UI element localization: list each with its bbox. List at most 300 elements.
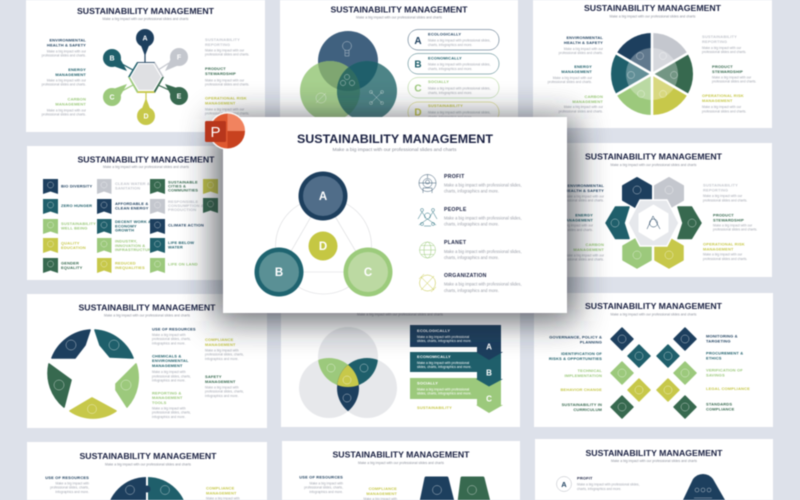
right labels: OPERATIONAL RISK: [205, 96, 247, 100]
hub diagram: F: [177, 54, 182, 62]
main slide shadow: [215, 119, 575, 321]
left labels: ENVIRONMENTAL: [567, 183, 604, 188]
slide: grey venn with arrow boxes: [280, 313, 520, 428]
right labels: Make a big impact with our: [205, 48, 245, 52]
ribbon column 3: LIFE BELOW: [168, 240, 194, 245]
compliance label: [363, 486, 397, 500]
ribbon column 2: AFFORDABLE &: [115, 201, 148, 206]
option A: [556, 476, 640, 492]
ribbon column 1: QUALITY: [61, 240, 80, 246]
right labels: STEWARDSHIP: [712, 69, 743, 74]
right column labels: COMPLIANCE: [205, 337, 234, 342]
ribbon column 3: WATER: [168, 244, 183, 250]
list item: planet: Make a big impact with professional slides,: [444, 249, 522, 254]
list item: profit: PROFIT: [444, 174, 465, 180]
shield shape: [683, 474, 725, 500]
slide subtitle: Make a big impact with our professional slides and charts: [610, 14, 696, 18]
slide title: SUSTAINABILITY MANAGEMENT: [80, 452, 216, 461]
pills A-D: ECONOMICALLY: [428, 56, 462, 60]
segmented ring: [48, 330, 138, 418]
right column labels: professional slides, charts,: [205, 352, 244, 356]
ribbon column 1: ZERO HUNGER: [61, 203, 92, 208]
left labels: Make a big impact with our: [47, 50, 87, 54]
pills A-D: charts, infographics and more.: [428, 91, 472, 95]
left labels: MANAGEMENT: [55, 102, 86, 106]
slide subtitle: Make a big impact with our professional slides and charts: [103, 17, 189, 21]
list item: profit: [419, 174, 522, 194]
hub diagram: D: [143, 114, 149, 120]
right labels: PRODUCT: [712, 64, 733, 69]
trapezoid shapes: [421, 478, 489, 500]
ribbon column 2: GROWTH: [115, 228, 134, 232]
right labels: SUSTAINABILITY: [205, 37, 240, 42]
right labels: [706, 334, 750, 412]
pills A-D: charts, infographics and more.: [428, 43, 472, 47]
center column labels: MANAGEMENT: [152, 363, 183, 368]
pills A-D: A: [414, 36, 422, 47]
icon: pie segment glyphs: [628, 52, 678, 98]
slide subtitle: Make a big impact with our professional slides and charts: [356, 16, 442, 20]
left labels: Make a big impact with our: [565, 254, 605, 258]
pills A-D: SOCIALLY: [428, 79, 449, 84]
slide title: SUSTAINABILITY MANAGEMENT: [585, 152, 722, 162]
left labels: professional slides and charts.: [42, 112, 86, 116]
right labels: Make a big impact with our: [713, 224, 753, 228]
main subtitle: Make a big impact with our professional slides and charts: [333, 147, 457, 153]
list item: profit: charts, infographics and more.: [444, 188, 499, 194]
right labels: [702, 34, 756, 114]
ribbon column 1: BIO DIVERSITY: [61, 184, 92, 188]
arrow boxes: A: [486, 342, 492, 352]
compliance label: MANAGEMENT: [366, 491, 397, 496]
right labels: SUSTAINABILITY: [703, 182, 738, 188]
left labels: [549, 183, 605, 262]
right labels: professional slides and charts.: [702, 50, 746, 54]
left label: USE OF RESOURCES: [45, 475, 89, 480]
left labels: professional slides and charts.: [560, 198, 604, 202]
pills A-D: C: [414, 84, 422, 94]
option A: PROFIT: [577, 476, 593, 480]
icon: light bulb: [342, 42, 352, 56]
slide title: SUSTAINABILITY MANAGEMENT: [330, 6, 468, 14]
left label: [45, 475, 89, 494]
left label: [299, 474, 343, 494]
right labels: SAVINGS: [706, 372, 725, 378]
center column labels: REPORTING &: [152, 390, 181, 396]
venn diagram: [300, 31, 397, 121]
list item: profit: Make a big impact with professional slides,: [444, 182, 522, 188]
left labels: BEHAVIOR CHANGE: [560, 387, 602, 392]
left labels: SUSTAINABILITY IN: [562, 402, 602, 407]
right column labels: SAFETY: [205, 374, 222, 379]
list item: organization: Make a big impact with professional slides,: [444, 282, 522, 286]
right labels: REPORTING: [702, 39, 727, 44]
left labels: IDENTIFICATION OF: [561, 351, 602, 356]
right column labels: Make a big impact with: [205, 348, 239, 352]
slide subtitle: Make a big impact with our professional slides and charts: [358, 461, 444, 465]
main title: SUSTAINABILITY MANAGEMENT: [297, 134, 493, 146]
hub diagram: C: [109, 94, 115, 102]
ribbon column 3: COMMUNITIES: [168, 188, 198, 192]
left labels: professional slides and charts.: [549, 228, 593, 232]
right labels: VERIFICATION OF: [706, 368, 743, 372]
left label: professional slides, charts,: [304, 486, 343, 490]
center column labels: ENVIRONMENTAL: [152, 358, 189, 363]
left labels: professional slides and charts.: [548, 80, 592, 84]
right labels: Make a big impact with our: [702, 105, 742, 109]
right labels: Make a big impact with our: [702, 46, 742, 50]
left labels: ENVIRONMENTAL: [566, 35, 603, 40]
right labels: OPERATIONAL RISK: [703, 242, 745, 246]
pills A-D: Make a big impact with professional slides,: [428, 110, 491, 114]
right labels: professional slides and charts.: [702, 110, 746, 114]
right labels: MANAGEMENT: [703, 246, 734, 252]
ribbon column 1: [43, 179, 100, 273]
left labels: Make a big impact with our: [47, 78, 87, 82]
pills A-D: SUSTAINABILITY: [428, 103, 463, 108]
list item: people: Make a big impact with professional slides,: [444, 216, 522, 220]
right labels: professional slides and charts.: [703, 198, 747, 202]
slide: goals ribbons: [27, 146, 265, 280]
ribbon column 2: CLEAN WATER &: [115, 181, 150, 186]
icon: crossed circle: [419, 274, 436, 292]
left labels: HEALTH & SAFETY: [564, 40, 603, 45]
slide title: SUSTAINABILITY MANAGEMENT: [585, 302, 722, 311]
left labels: IMPLEMENTATION: [564, 373, 602, 378]
icon: leaf: [316, 93, 326, 103]
center column labels: infographics and more.: [152, 342, 186, 346]
ribbon column 3: CLIMATE ACTION: [168, 222, 204, 228]
slide title: SUSTAINABILITY MANAGEMENT: [584, 4, 721, 13]
icon: globe: [420, 242, 436, 258]
arrow boxes: Make a big impact with professional: [417, 388, 469, 392]
left labels: CARBON: [586, 242, 604, 247]
left label: infographics and more.: [309, 490, 343, 494]
left labels: HEALTH & SAFETY: [47, 42, 86, 48]
ribbon column 1: EDUCATION: [61, 245, 86, 250]
arrow boxes: B: [486, 368, 492, 378]
arrow boxes: ECONOMICALLY: [417, 354, 451, 359]
slide: six-segment pie: [533, 0, 772, 128]
icon: shield and bulb: [126, 486, 170, 494]
slide: hub with six petals: [26, 0, 265, 132]
ribbon column 3: LIFE ON LAND: [168, 262, 198, 266]
right labels: OPERATIONAL RISK: [702, 93, 744, 98]
right labels: COMPLIANCE: [706, 406, 735, 412]
list item: people: [418, 207, 522, 226]
pills A-D: Make a big impact with professional slides,: [428, 86, 491, 90]
arrow boxes: SUSTAINABILITY: [417, 405, 452, 410]
left labels: [548, 35, 604, 114]
center column labels: [152, 326, 196, 419]
slide title: SUSTAINABILITY MANAGEMENT: [332, 300, 468, 309]
hub diagram: B: [109, 56, 115, 62]
left labels: TECHNICAL: [578, 368, 602, 373]
ribbon column 1: EQUALITY: [61, 265, 83, 270]
right labels: professional slides and charts.: [713, 228, 757, 232]
center column labels: CHEMICALS &: [152, 354, 181, 358]
option A: Make a big impact with professional slides,: [577, 482, 640, 486]
left label: Make a big impact with: [309, 482, 343, 486]
left labels: [549, 334, 603, 412]
pills A-D: D: [414, 108, 422, 118]
slide subtitle: Make a big impact with our professional slides and charts: [104, 314, 190, 318]
slide title: SUSTAINABILITY MANAGEMENT: [78, 156, 214, 164]
icon: people network: [418, 208, 437, 226]
right labels: PRODUCT: [205, 66, 226, 71]
left labels: Make a big impact with our: [553, 76, 593, 80]
ribbon column 2: INFRASTRUCTURE: [115, 247, 154, 252]
slide subtitle: Make a big impact with our professional slides and charts: [611, 459, 697, 463]
left labels: HEALTH & SAFETY: [565, 188, 604, 193]
option A: charts, infographics and more.: [577, 487, 621, 491]
ribbon column 2: INEQUALITIES: [115, 265, 145, 270]
center column labels: Make a big impact with: [152, 333, 186, 337]
node C: C: [364, 267, 372, 279]
right labels: Make a big impact with our: [703, 252, 743, 256]
ribbon column 3: SUSTAINABLE: [168, 180, 198, 184]
hexagon diagram: [606, 178, 701, 268]
ribbon column 1: GENDER: [61, 260, 79, 266]
left labels: professional slides and charts.: [559, 51, 603, 55]
pills A-D: charts, infographics and more.: [428, 115, 472, 119]
pills A-D: Make a big impact with professional slides,: [428, 62, 491, 66]
left labels: Make a big impact with our: [47, 108, 87, 112]
right labels: professional slides and charts.: [703, 257, 747, 261]
icon: diamond glyphs: [618, 335, 689, 411]
slide: five-segment ring: [27, 294, 267, 428]
hub diagram: A: [142, 36, 148, 42]
ribbon column 2: SANITATION: [115, 186, 140, 190]
slide: hexagon cluster: [533, 143, 772, 277]
right labels: MANAGEMENT: [702, 98, 733, 103]
list item: organization: [419, 273, 522, 293]
right labels: REPORTING: [703, 188, 728, 192]
list item: organization: ORGANIZATION: [444, 273, 487, 279]
left labels: ENVIRONMENTAL: [49, 38, 86, 42]
left labels: GOVERNANCE, POLICY &: [549, 334, 602, 340]
left labels: Make a big impact with our: [565, 194, 605, 198]
left labels: professional slides and charts.: [559, 110, 603, 114]
slide subtitle: Make a big impact with our professional slides and charts: [611, 312, 697, 316]
right label: [206, 486, 240, 500]
left labels: ENERGY: [575, 212, 593, 218]
pills A-D: charts, infographics and more.: [428, 67, 472, 71]
slide: diamond grid: [534, 293, 773, 427]
left labels: Make a big impact with our: [554, 224, 594, 228]
slide title: SUSTAINABILITY MANAGEMENT: [78, 304, 216, 312]
list item: planet: PLANET: [444, 240, 467, 246]
slide subtitle: Make a big impact with our professional slides and charts: [611, 163, 697, 167]
right labels: LEGAL COMPLIANCE: [706, 386, 750, 391]
left labels: CURRICULUM: [573, 407, 603, 412]
right labels: ETHICS: [706, 356, 722, 360]
right column labels: [205, 337, 244, 398]
icon: network: [370, 90, 384, 104]
left labels: MANAGEMENT: [573, 247, 604, 252]
node B: B: [275, 267, 283, 279]
right label: COMPLIANCE: [206, 486, 235, 490]
left label: USE OF RESOURCES: [299, 474, 343, 480]
icon: PowerPoint logo: P: [210, 124, 221, 141]
right labels: PRODUCT: [713, 212, 734, 218]
icon: people: [694, 488, 712, 498]
left labels: MANAGEMENT: [561, 69, 592, 74]
arrow boxes: [410, 325, 503, 413]
right labels: MONITORING &: [706, 334, 738, 338]
ribbon column 2: REDUCED: [115, 260, 136, 266]
center column labels: professional slides, charts,: [152, 374, 191, 378]
left label: Make a big impact with: [55, 482, 89, 486]
right labels: PROCUREMENT &: [706, 350, 743, 356]
right labels: STEWARDSHIP: [205, 71, 236, 76]
right column labels: Make a big impact with: [205, 386, 239, 390]
right labels: Make a big impact with our: [712, 76, 752, 80]
right column labels: infographics and more.: [205, 357, 239, 361]
pills A-D: ECOLOGICALLY: [428, 32, 461, 36]
arrow boxes: ECOLOGICALLY: [417, 328, 450, 333]
ribbon column 1: WELL BEING: [61, 226, 88, 230]
pills A-D: Make a big impact with professional slides,: [428, 38, 491, 42]
ribbon column 2: ECONOMY: [115, 224, 137, 228]
left labels: MANAGEMENT: [572, 99, 603, 104]
slide: shield: [535, 439, 773, 500]
left labels: Make a big impact with our: [564, 105, 604, 109]
left labels: ENERGY: [574, 64, 592, 69]
panel: main slide: [223, 117, 567, 313]
left labels: MANAGEMENT: [55, 72, 86, 77]
right labels: Make a big impact with our: [703, 194, 743, 198]
right labels: MANAGEMENT: [205, 100, 236, 106]
venn triangle diagram: [254, 172, 392, 296]
center column labels: Make a big impact with: [152, 370, 186, 374]
slide title: SUSTAINABILITY MANAGEMENT: [77, 7, 214, 16]
ribbon column 3: RESPONSIBLE: [168, 199, 199, 204]
right labels: [205, 37, 249, 116]
left labels: [42, 38, 87, 116]
right labels: STANDARDS: [706, 402, 732, 406]
venn diagram: [299, 327, 397, 418]
ribbon column 2: [97, 179, 154, 273]
ribbon column 3: PRODUCTION: [168, 207, 196, 212]
arrow boxes: slides, charts, infographics and more.: [417, 365, 472, 369]
center column labels: USE OF RESOURCES: [152, 326, 196, 332]
slide subtitle: Make a big impact with our professional slides and charts: [105, 462, 191, 466]
ribbon column 3: CITIES &: [168, 184, 186, 188]
slide: rounded trapezoids: [282, 441, 520, 500]
arrow boxes: SOCIALLY: [417, 380, 438, 386]
right labels: professional slides and charts.: [205, 52, 249, 56]
hub diagram: [103, 29, 188, 125]
slide: three-circle venn with pills: [280, 0, 518, 130]
ribbon column 2: INDUSTRY,: [115, 238, 137, 244]
diamonds: [611, 328, 696, 418]
ribbon column 1: SUSTAINABILITY &: [61, 221, 100, 226]
left labels: PLANNING: [580, 340, 602, 344]
left labels: CARBON: [585, 94, 603, 99]
right column labels: professional slides, charts,: [205, 390, 244, 394]
hub diagram: E: [177, 94, 182, 100]
icon: PowerPoint logo: [205, 112, 246, 150]
node A: A: [319, 191, 327, 203]
icon: gears: [340, 74, 355, 86]
icon: venn glyphs: [327, 364, 368, 402]
ribbon column 2: DECENT WORK &: [115, 219, 151, 224]
right labels: Make a big impact with our: [205, 108, 245, 112]
right labels: SUSTAINABILITY: [702, 34, 737, 39]
arrow boxes: Make a big impact with professional: [417, 361, 469, 365]
left label: infographics and more.: [55, 490, 89, 494]
left labels: professional slides and charts.: [560, 258, 604, 262]
right labels: [703, 182, 757, 261]
list item: people: charts, infographics and more.: [444, 222, 499, 226]
right labels: TARGETING: [706, 338, 731, 344]
ribbon column 3: [150, 179, 204, 273]
right labels: Make a big impact with our: [205, 78, 245, 82]
pills A-D: [408, 30, 499, 122]
list item: organization: charts, infographics and more.: [444, 288, 499, 293]
slide title: SUSTAINABILITY MANAGEMENT: [586, 449, 722, 458]
option A: A: [561, 480, 567, 489]
slide: split circle: [27, 442, 267, 500]
center column labels: professional slides, charts,: [152, 337, 191, 341]
arrow boxes: C: [486, 394, 492, 404]
list item: planet: [420, 240, 522, 260]
right labels: REPORTING: [205, 42, 230, 47]
right labels: professional slides and charts.: [712, 80, 756, 84]
right column labels: MANAGEMENT: [205, 379, 236, 384]
icon: segment glyphs: [54, 340, 131, 414]
left labels: MANAGEMENT: [562, 218, 593, 222]
icon: target: [419, 174, 436, 193]
center column labels: Make a big impact with: [152, 406, 186, 410]
slide subtitle: Make a big impact with our professional slides and charts: [103, 165, 189, 169]
ribbon column 4: [203, 179, 218, 213]
center column labels: professional slides, charts,: [152, 410, 191, 414]
left labels: ENERGY: [68, 67, 86, 72]
left labels: professional slides and charts.: [42, 82, 86, 86]
arrow boxes: slides, charts, infographics and more.: [417, 392, 472, 396]
pie chart: [611, 30, 693, 118]
center column labels: infographics and more.: [152, 378, 186, 382]
arrow boxes: slides, charts, infographics and more.: [417, 339, 472, 343]
arrow boxes: Make a big impact with professional: [417, 335, 469, 339]
list item: planet: charts, infographics and more.: [444, 255, 499, 260]
center column labels: MANAGEMENT: [152, 395, 183, 400]
right labels: STEWARDSHIP: [713, 218, 744, 222]
ribbon column 2: CLEAN ENERGY: [115, 206, 149, 210]
list item: people: PEOPLE: [444, 207, 467, 213]
pills A-D: B: [414, 60, 422, 70]
slide title: SUSTAINABILITY MANAGEMENT: [332, 450, 470, 460]
compliance label: COMPLIANCE: [369, 486, 397, 491]
node D: D: [319, 241, 327, 253]
center column labels: infographics and more.: [152, 415, 186, 419]
right label: MANAGEMENT: [206, 490, 237, 496]
left labels: Make a big impact with our: [564, 47, 604, 51]
icon: trapezoid glyphs: [432, 486, 476, 494]
right column labels: MANAGEMENT: [205, 342, 236, 347]
left label: professional slides, charts,: [50, 486, 89, 490]
left labels: CARBON: [68, 96, 86, 102]
left labels: RISKS & OPPORTUNITIES: [549, 356, 602, 361]
ribbon column 3: CONSUMPTION &: [168, 203, 204, 208]
icon: recycling globe: [647, 216, 660, 229]
slide subtitle: Make a big impact with our professional slides and charts: [357, 312, 443, 316]
left labels: professional slides and charts.: [42, 54, 86, 58]
right labels: professional slides and charts.: [205, 82, 249, 86]
right column labels: infographics and more.: [205, 394, 239, 398]
